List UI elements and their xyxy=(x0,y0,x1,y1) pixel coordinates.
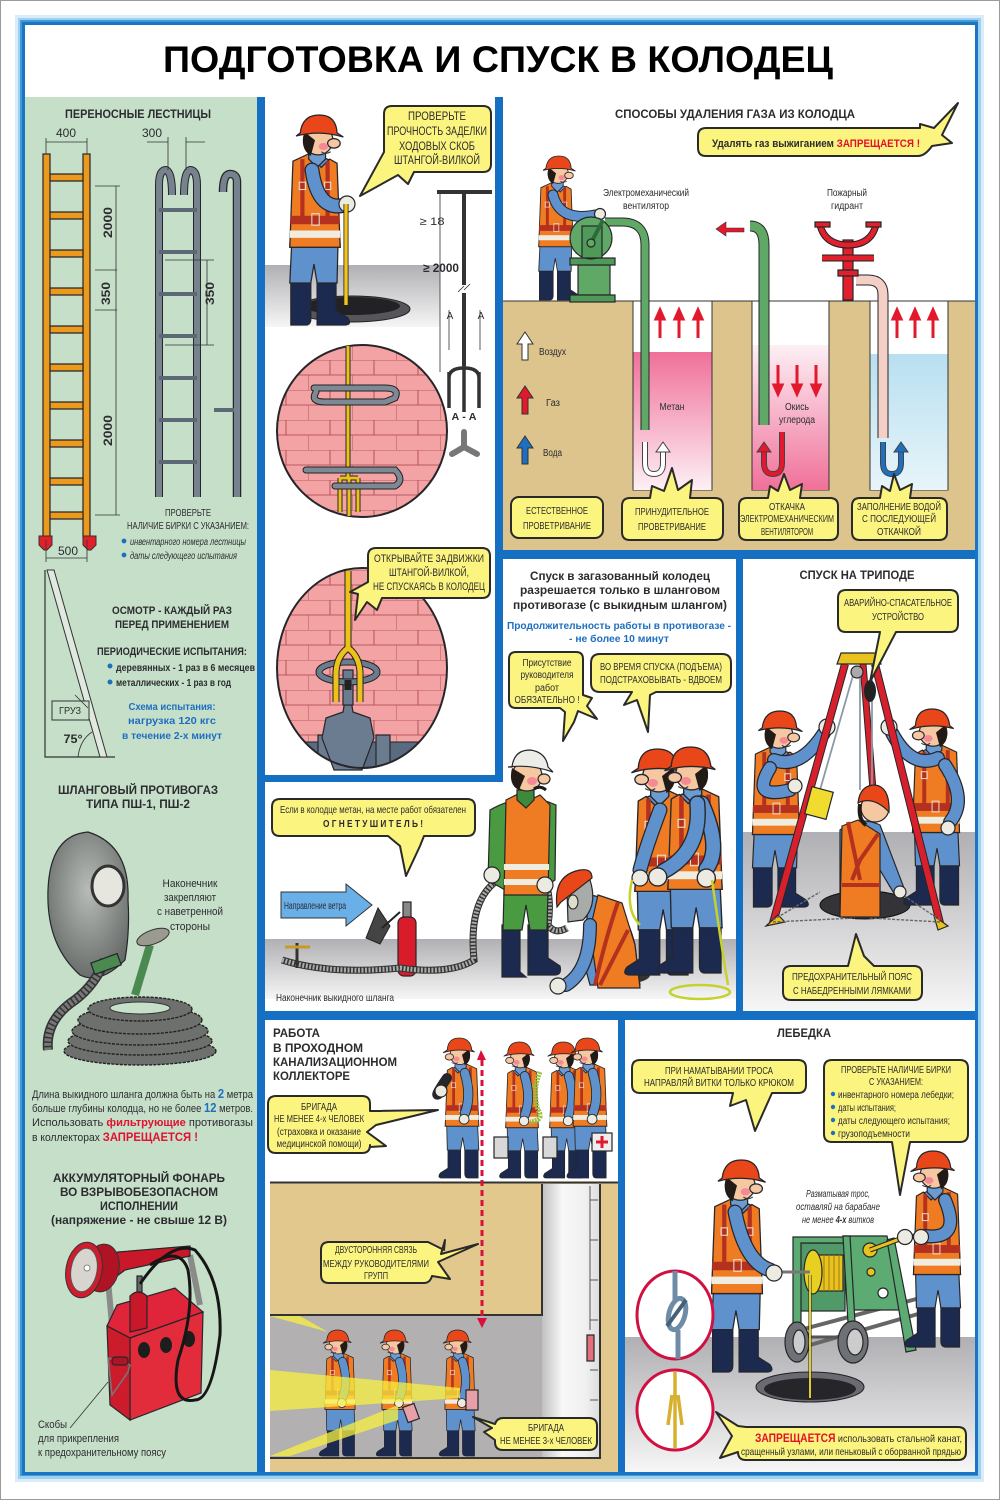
note: keep four turns: не менее 4-х витков xyxy=(802,1215,874,1226)
wooden ladder: 2000 xyxy=(101,207,115,238)
callout: team of four: медицинской помощи) xyxy=(276,1139,362,1150)
callout: supervisor presence: руководителя xyxy=(520,670,574,681)
callout: team of four: НЕ МЕНЕЕ 4-х ЧЕЛОВЕК xyxy=(274,1113,365,1125)
callout: natural ventilation: ЕСТЕСТВЕННОЕ xyxy=(526,505,588,517)
legend: air, gas, water: Воздух xyxy=(539,347,566,358)
heading: portable ladders: ПЕРЕНОСНЫЕ ЛЕСТНИЦЫ xyxy=(65,107,211,121)
inspection text: ПЕРЕД ПРИМЕНЕНИЕМ xyxy=(115,619,229,631)
tag check note: инвентарного номера лестницы xyxy=(130,537,246,548)
crouching worker in gas mask xyxy=(550,870,650,994)
fork rod drawing with dimensions: ≥ 2000 xyxy=(423,261,459,275)
callout: winch tag: инвентарного номера лебедки; xyxy=(838,1089,954,1101)
manhole xyxy=(756,1372,864,1402)
manhole xyxy=(294,296,410,322)
team of three workers in tunnel xyxy=(319,1330,478,1456)
tag check note: НАЛИЧИЕ БИРКИ С УКАЗАНИЕМ: xyxy=(127,521,249,532)
callout: check staples: ХОДОВЫХ СКОБ xyxy=(399,141,475,153)
note: brackets: Скобы xyxy=(38,1419,67,1431)
callout: forbidden rope types xyxy=(716,1412,966,1460)
manhole xyxy=(820,891,910,919)
heading: work in collector xyxy=(273,1026,397,1083)
callout: pumping out with fan: ВЕНТИЛЯТОРОМ xyxy=(761,527,813,538)
panel: gas removal methods xyxy=(503,103,975,550)
heading: descent with gas mask: разрешается только в шланговом xyxy=(520,583,720,597)
panel: ladders, gas mask and lantern xyxy=(25,97,257,1472)
callout: winding the cable: НАПРАВЛЯЙ ВИТКИ ТОЛЬКО КРЮКОМ xyxy=(644,1076,794,1089)
second pipe xyxy=(716,222,764,425)
callout: pumping out with fan: ЭЛЕКТРОМЕХАНИЧЕСКИМ xyxy=(740,514,834,525)
note: nozzle fixed on windward side: стороны xyxy=(170,921,210,933)
note: nozzle fixed on windward side: закрепляют xyxy=(164,892,216,904)
callout: forced ventilation xyxy=(622,468,723,540)
callout: extinguisher required: О Г Н Е Т У Ш И Т Е Л Ь ! xyxy=(323,819,423,830)
callout: two-way communication: ГРУПП xyxy=(364,1270,388,1282)
callout: winding the cable xyxy=(632,1060,806,1131)
callout: check staples: ПРОВЕРЬТЕ xyxy=(408,111,466,123)
panel: descent into gassy well xyxy=(507,569,731,741)
hose length paragraph xyxy=(32,1086,254,1144)
legend: air, gas, water: Вода xyxy=(543,448,562,459)
callout: supervisor presence: Присутствие xyxy=(522,658,572,669)
wooden ladder: 350 xyxy=(99,282,113,305)
callout: filling with water: С ПОСЛЕДУЮЩЕЙ xyxy=(862,512,936,525)
callout: winding the cable: ПРИ НАМАТЫВАНИИ ТРОСА xyxy=(665,1065,773,1077)
callout: winch tag xyxy=(824,1060,968,1195)
supervisor in white helmet xyxy=(484,750,560,977)
callout: check staples xyxy=(360,106,491,196)
callout: filling with water: ОТКАЧКОЙ xyxy=(877,525,921,538)
heading: descent with gas mask: противогазе (с выкидным шлангом) xyxy=(513,598,727,612)
safety rope xyxy=(630,880,730,999)
callout: pumping out with fan: ОТКАЧКА xyxy=(769,502,805,513)
heading: work in collector: КАНАЛИЗАЦИОННОМ xyxy=(273,1055,397,1069)
icon: gas mask with hose coil xyxy=(48,832,216,1065)
tag check note xyxy=(122,508,249,562)
gas labels: Метан xyxy=(660,402,684,413)
note: nozzle fixed on windward side: Наконечник xyxy=(162,878,218,890)
inspection text: ПЕРИОДИЧЕСКИЕ ИСПЫТАНИЯ: xyxy=(97,646,247,658)
callout: open valves: НЕ СПУСКАЯСЬ В КОЛОДЕЦ xyxy=(373,581,485,593)
inspection text: Схема испытания: xyxy=(128,701,216,713)
fork rod drawing with dimensions: А - А xyxy=(452,412,476,423)
brick wall circle with valve xyxy=(277,568,447,772)
wooden ladder: 2000 xyxy=(101,415,115,446)
icon: knotted rope forbidden xyxy=(637,1271,713,1359)
callout: pumping out with fan xyxy=(739,474,838,540)
labels: fan and hydrant: гидрант xyxy=(831,201,863,212)
note: keep four turns xyxy=(796,1189,880,1226)
callout: two insurers: ВО ВРЕМЯ СПУСКА (ПОДЪЕМА) xyxy=(600,661,722,673)
fire extinguisher xyxy=(366,902,416,976)
fire hydrant with pipe xyxy=(815,222,883,438)
blue panel dividers xyxy=(257,97,975,1472)
hose length paragraph: Длина выкидного шланга должна быть на 2 метра xyxy=(32,1086,254,1101)
callout: supervisor presence xyxy=(509,652,597,741)
callout: team of four xyxy=(268,1096,438,1153)
callout: natural ventilation xyxy=(511,497,603,538)
note: keep four turns: оставляй на барабане xyxy=(796,1201,880,1213)
callout: check staples: ШТАНГОЙ-ВИЛКОЙ xyxy=(394,154,480,167)
callout: team of three: БРИГАДА xyxy=(528,1423,564,1434)
icon: frayed rope forbidden xyxy=(637,1370,713,1450)
callout: safety belt xyxy=(783,934,922,1000)
U-turn arrows xyxy=(645,432,908,474)
inspection text: металлических - 1 раз в год xyxy=(116,677,231,689)
note: nozzle fixed on windward side: с наветренной xyxy=(157,906,223,918)
metal ladder front and side views: 300 xyxy=(142,126,162,140)
underground and tunnel xyxy=(270,1182,618,1472)
tag check note: даты следующего испытания xyxy=(130,551,237,562)
note: brackets: к предохранительному поясу xyxy=(38,1447,166,1459)
inspection text: ОСМОТР - КАЖДЫЙ РАЗ xyxy=(112,604,232,617)
gas labels: углерода xyxy=(779,415,815,426)
hose with nozzle on the ground xyxy=(282,880,567,970)
labels: fan and hydrant xyxy=(603,188,867,212)
callout: team of four: (страховка и оказание xyxy=(277,1127,361,1138)
heading: battery lantern: ИСПОЛНЕНИИ xyxy=(100,1199,178,1213)
ground and well shafts xyxy=(503,301,975,550)
heading: descent with gas mask: Спуск в загазованный колодец xyxy=(530,569,711,583)
caption: hose nozzle: Наконечник выкидного шланга xyxy=(276,992,394,1004)
callout: burning forbidden xyxy=(698,103,958,156)
title: ПОДГОТОВКА И СПУСК В КОЛОДЕЦ xyxy=(163,39,833,80)
worker at winch, left xyxy=(712,1160,782,1372)
heading: battery lantern: (напряжение - не свыше 12 В) xyxy=(51,1215,227,1227)
callout: winch tag: ПРОВЕРЬТЕ НАЛИЧИЕ БИРКИ xyxy=(841,1064,951,1076)
panel: winch xyxy=(625,1026,975,1472)
heading: battery lantern xyxy=(51,1170,227,1227)
fork rod drawing with dimensions: ≥ 18 xyxy=(420,216,444,228)
wooden ladder: 400 xyxy=(56,126,76,140)
yellow rod xyxy=(344,204,348,305)
heading: work in collector: В ПРОХОДНОМ xyxy=(273,1041,363,1055)
callout: open valves: ШТАНГОЙ-ВИЛКОЙ, xyxy=(389,566,469,579)
wooden ladder: 500 xyxy=(58,544,78,558)
callout: winch tag: даты испытания; xyxy=(838,1103,896,1114)
heading: descent with gas mask xyxy=(507,569,731,645)
heading: gas removal: СПОСОБЫ УДАЛЕНИЯ ГАЗА ИЗ КОЛОДЦА xyxy=(615,107,855,121)
wooden ladder xyxy=(39,126,120,562)
callout: forced ventilation: ПРОВЕТРИВАНИЕ xyxy=(638,521,706,533)
gas labels xyxy=(660,402,815,426)
callout: forced ventilation: ПРИНУДИТЕЛЬНОЕ xyxy=(635,506,709,518)
panel: descent on tripod xyxy=(743,568,975,1011)
note: nozzle fixed on windward side xyxy=(157,878,223,933)
note: brackets xyxy=(38,1419,166,1459)
electromechanical fan with pipe xyxy=(570,217,645,430)
heading: winch: ЛЕБЕДКА xyxy=(777,1026,831,1040)
metal ladder front and side views xyxy=(142,126,237,497)
callout: open valves xyxy=(350,548,490,620)
note: keep four turns: Разматывая трос, xyxy=(806,1189,870,1200)
inspection text: деревянных - 1 раз в 6 месяцев xyxy=(116,662,255,674)
labels: fan and hydrant: Пожарный xyxy=(827,188,867,199)
flow arrows xyxy=(656,310,937,394)
callout: supervisor presence: ОБЯЗАТЕЛЬНО ! xyxy=(514,695,580,706)
callout: rescue device: АВАРИЙНО-СПАСАТЕЛЬНОЕ xyxy=(844,596,952,609)
winch xyxy=(753,1236,925,1398)
callout: two insurers: ПОДСТРАХОВЫВАТЬ - ВДВОЕМ xyxy=(600,674,722,686)
ladder load test diagram xyxy=(45,570,115,757)
heading: battery lantern: ВО ВЗРЫВОБЕЗОПАСНОМ xyxy=(60,1185,218,1199)
callout: filling with water: ЗАПОЛНЕНИЕ ВОДОЙ xyxy=(857,500,941,513)
worker on right xyxy=(881,709,960,905)
callout: two-way communication: МЕЖДУ РУКОВОДИТЕЛЯМИ xyxy=(323,1258,429,1270)
ladder load test diagram: ГРУЗ xyxy=(59,706,81,717)
inspection text xyxy=(97,604,255,742)
heading: battery lantern: АККУМУЛЯТОРНЫЙ ФОНАРЬ xyxy=(53,1170,225,1185)
callout: team of three: НЕ МЕНЕЕ 3-х ЧЕЛОВЕК xyxy=(500,1435,593,1447)
fork rod drawing with dimensions: А xyxy=(447,311,454,322)
callout: supervisor presence: работ xyxy=(535,682,559,694)
callout: winch tag: даты следующего испытания; xyxy=(838,1116,950,1127)
team of four workers xyxy=(435,1038,612,1178)
heading: hose gas mask: ТИПА ПШ-1, ПШ-2 xyxy=(86,797,190,811)
callout: rescue device: УСТРОЙСТВО xyxy=(872,610,924,623)
callout: open valves: ОТКРЫВАЙТЕ ЗАДВИЖКИ xyxy=(374,552,484,565)
fork rod drawing with dimensions xyxy=(420,192,492,454)
note: brackets: для прикрепления xyxy=(38,1433,119,1445)
heading: hose gas mask xyxy=(58,782,218,811)
callout: winch tag: грузоподъемности xyxy=(838,1129,910,1140)
callout: extinguisher required: Если в колодце метан, на месте работ обязателен xyxy=(280,804,466,816)
hose length paragraph: больше глубины колодца, но не более 12 метров. xyxy=(32,1100,253,1115)
brick wall circle with staples xyxy=(277,345,447,517)
heading: tripod: СПУСК НА ТРИПОДЕ xyxy=(800,568,914,582)
heading: work in collector: КОЛЛЕКТОРЕ xyxy=(273,1069,350,1083)
hose length paragraph: Использовать фильтрующие противогазы xyxy=(32,1117,253,1129)
tripod and lifting device xyxy=(766,653,948,930)
panel: work in sewer collector xyxy=(268,1026,618,1472)
worker at the fan xyxy=(539,156,606,300)
heading: hose gas mask: ШЛАНГОВЫЙ ПРОТИВОГАЗ xyxy=(58,782,218,797)
arrow: two-way link xyxy=(477,1050,487,1328)
heading: work in collector: РАБОТА xyxy=(273,1026,320,1040)
callout: rescue device xyxy=(838,590,958,682)
callout: extinguisher required xyxy=(272,799,475,876)
worker being lowered xyxy=(840,785,906,917)
callout: natural ventilation: ПРОВЕТРИВАНИЕ xyxy=(523,520,591,532)
fork rod drawing with dimensions: А xyxy=(478,311,485,322)
labels: fan and hydrant: вентилятор xyxy=(623,201,669,212)
callout: forbidden rope types: ЗАПРЕЩАЕТСЯ использовать стальной канат, xyxy=(755,1431,962,1445)
inspection text: нагрузка 120 кгс xyxy=(128,715,216,727)
callout: burning forbidden: Удалять газ выжиганием ЗАПРЕЩАЕТСЯ ! xyxy=(712,138,920,150)
metal ladder front and side views: 350 xyxy=(203,282,217,305)
panel: checking staples with fork rod xyxy=(265,106,492,772)
callout: two-way communication: ДВУСТОРОННЯЯ СВЯЗЬ xyxy=(335,1244,417,1256)
worker checking with rod xyxy=(290,115,355,325)
callout: safety belt: ПРЕДОХРАНИТЕЛЬНЫЙ ПОЯС xyxy=(792,970,912,983)
yellow lamp beams xyxy=(270,1316,460,1456)
callout: two-way communication xyxy=(321,1240,478,1283)
inspection text: в течение 2-х минут xyxy=(122,730,222,742)
worker at winch, right xyxy=(898,1151,961,1347)
callout: safety belt: С НАБЕДРЕННЫМИ ЛЯМКАМИ xyxy=(793,985,911,997)
gas labels: Окись xyxy=(785,402,809,413)
callout: team of three xyxy=(473,1417,597,1450)
callout: team of four: БРИГАДА xyxy=(301,1102,337,1113)
heading: descent with gas mask: Продолжительность работы в противогазе - xyxy=(507,620,731,632)
arrow: wind direction xyxy=(281,884,372,926)
legend: air, gas, water xyxy=(517,332,566,464)
heading: descent with gas mask: - не более 10 минут xyxy=(569,633,669,645)
labels: fan and hydrant: Электромеханический xyxy=(603,188,689,199)
callout: winch tag: С УКАЗАНИЕМ: xyxy=(869,1076,923,1088)
icon: red explosion-proof lantern xyxy=(61,1239,220,1428)
ladder load test diagram: 75° xyxy=(64,732,83,746)
callout: check staples: ПРОЧНОСТЬ ЗАДЕЛКИ xyxy=(387,126,487,138)
legend: air, gas, water: Газ xyxy=(546,398,560,409)
tag check note: ПРОВЕРЬТЕ xyxy=(165,508,211,519)
callout: two insurers xyxy=(591,654,731,732)
callout: filling with water xyxy=(852,474,947,540)
panel: extinguisher and hose xyxy=(265,747,736,1004)
worker on left xyxy=(752,711,835,907)
hose length paragraph: в коллекторах ЗАПРЕЩАЕТСЯ ! xyxy=(32,1130,198,1144)
two workers holding line xyxy=(625,747,722,975)
arrow: wind direction: Направление ветра xyxy=(284,901,346,912)
